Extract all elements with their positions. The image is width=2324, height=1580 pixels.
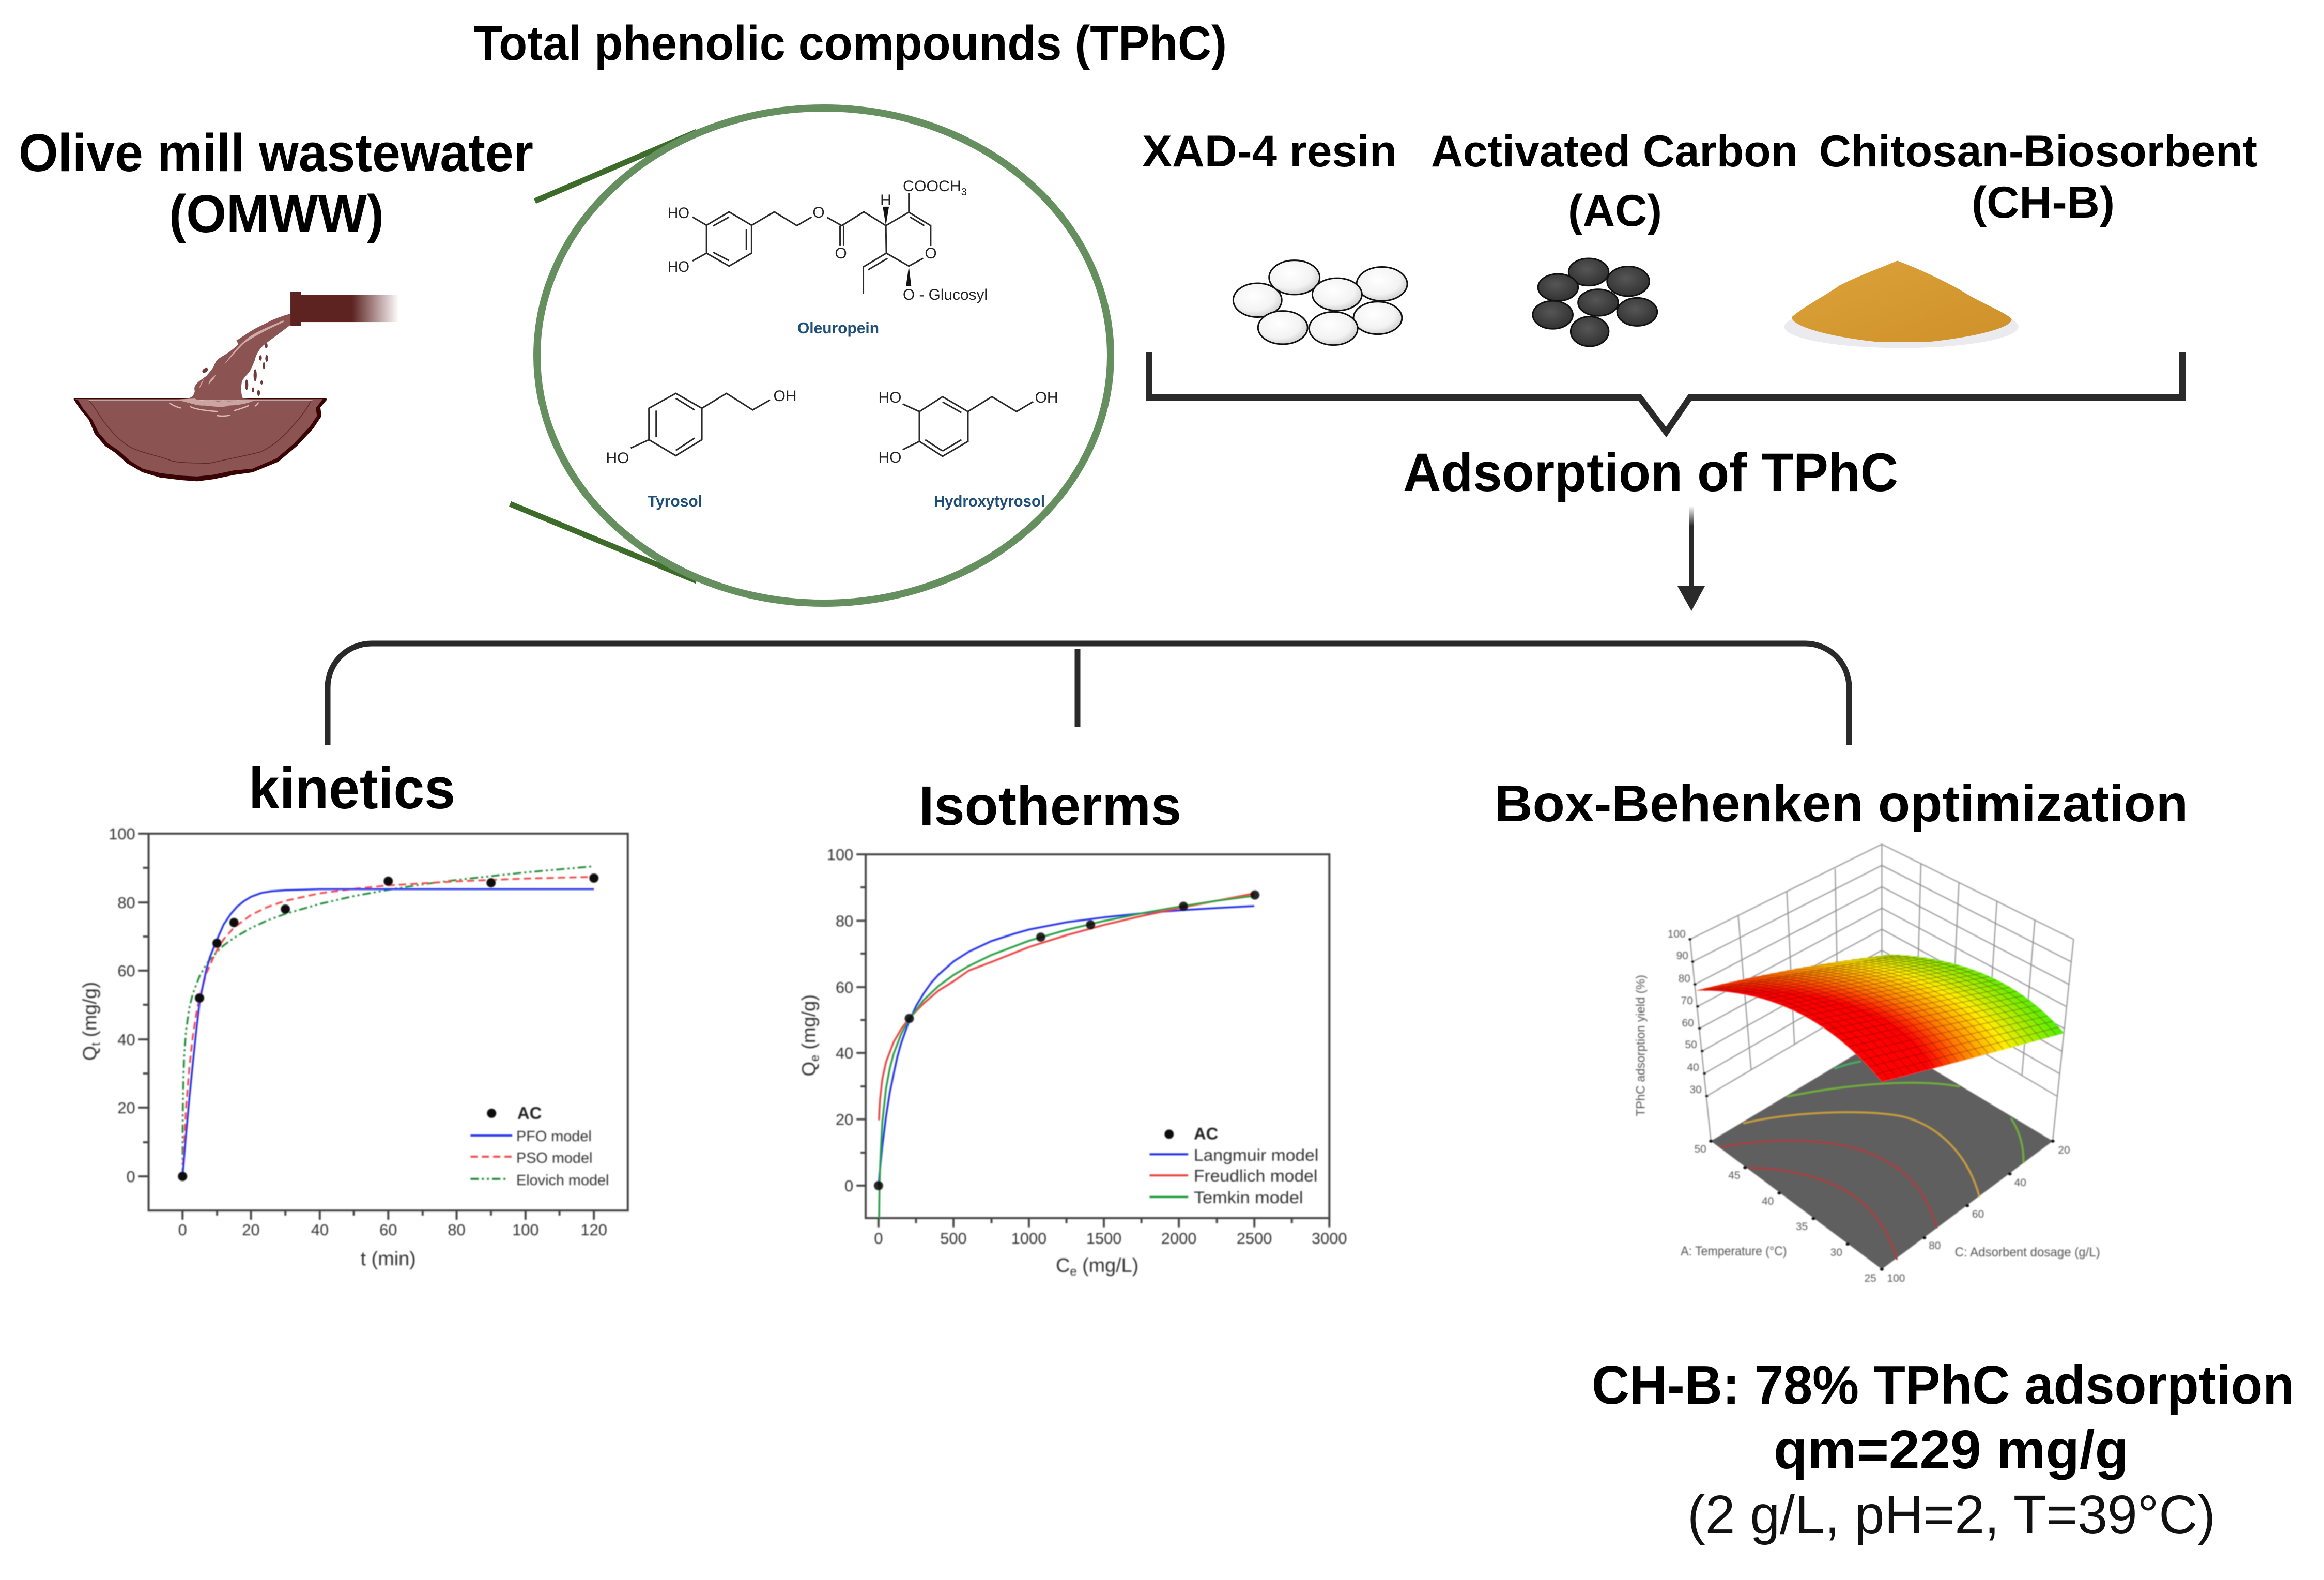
heading: isotherms: Isotherms: [919, 774, 1181, 837]
molecule: oleuropein: O: [835, 245, 847, 262]
axis labels: temperature: A: Temperature (°C): [1681, 1244, 1787, 1259]
molecule: oleuropein: O: [925, 245, 937, 262]
axis labels: adsorbent dosage: 20: [2058, 1144, 2070, 1156]
axis labels: adsorbent dosage: 60: [1972, 1208, 1984, 1220]
molecule: oleuropein: H: [880, 192, 891, 209]
response surface: [1696, 955, 2064, 1082]
molecule: hydroxytyrosol: OH: [1035, 389, 1058, 406]
axis labels: temperature: [1681, 1143, 1876, 1284]
heading: kinetics: kinetics: [249, 756, 455, 821]
axis labels: response axis: 50: [1685, 1039, 1697, 1051]
chart: isotherms: (mg/L): [1077, 1255, 1138, 1277]
result text: CH-B adsorption summary: qm=229 mg/g: [1774, 1419, 2129, 1480]
chart: kinetics: t: [89, 1042, 103, 1046]
legend: isotherms: Langmuir model: [1194, 1145, 1318, 1164]
molecule: hydroxytyrosol: Hydroxytyrosol: [934, 492, 1045, 510]
axis labels: response axis: TPhC adsorption yield (%): [1634, 975, 1648, 1116]
chart: isotherms: 1000: [1011, 1229, 1046, 1247]
result text: CH-B adsorption summary: CH-B: 78% TPhC adsorption: [1592, 1355, 2295, 1416]
heading: activated carbon: Activated Carbon: [1431, 127, 1798, 176]
axis labels: temperature: 35: [1796, 1221, 1808, 1233]
axis labels: adsorbent dosage: 80: [1929, 1240, 1941, 1252]
chart: isotherms: 0: [844, 1177, 853, 1195]
chart: kinetics: 100: [512, 1221, 539, 1239]
axis labels: response axis: 70: [1681, 995, 1693, 1007]
legend: kinetics: PSO model: [516, 1150, 592, 1167]
axis labels: temperature: 30: [1830, 1247, 1842, 1259]
legend: kinetics: Elovich model: [516, 1172, 609, 1189]
chart: kinetics: 40: [311, 1221, 329, 1239]
chart: kinetics: 0: [127, 1168, 135, 1186]
molecule: tyrosol: [606, 388, 797, 510]
chart: kinetics: 80: [117, 894, 135, 912]
legend: isotherms: [1150, 1124, 1318, 1207]
legend: kinetics: AC: [517, 1103, 542, 1123]
bracket: three analyses: [328, 643, 1849, 745]
molecule: oleuropein: O - Glucosyl: [903, 286, 988, 303]
chart: isotherms: 500: [940, 1229, 967, 1247]
icon: chitosan biosorbent powder: [1784, 260, 2019, 348]
legend: kinetics: PFO model: [516, 1128, 592, 1145]
axis labels: temperature: 25: [1864, 1272, 1876, 1284]
heading: activated carbon: (AC): [1568, 186, 1662, 236]
icon: white resin beads: [1233, 260, 1407, 345]
chart: kinetics: 20: [242, 1221, 260, 1239]
chart: isotherms: e: [1070, 1265, 1077, 1279]
legend: isotherms: Freudlich model: [1194, 1166, 1317, 1185]
icon: wastewater pouring from pipe into basin: [75, 292, 399, 480]
molecule: tyrosol: HO: [606, 450, 629, 467]
chart: kinetics: 0: [178, 1221, 187, 1239]
legend: isotherms: AC: [1194, 1124, 1218, 1143]
chart: kinetics: 60: [379, 1221, 397, 1239]
chart: kinetics: 60: [117, 962, 135, 980]
molecule: hydroxytyrosol: HO: [879, 389, 901, 406]
chart: isotherms: 60: [836, 978, 853, 996]
axis labels: adsorbent dosage: 100: [1887, 1272, 1905, 1284]
magnifier ellipse: [537, 108, 1111, 603]
heading: chitosan biosorbent: [1819, 127, 2257, 227]
chart: isotherms: 1500: [1086, 1229, 1121, 1247]
chart: isotherms: e: [808, 1055, 822, 1062]
chart: isotherms: 20: [836, 1111, 853, 1129]
chart: kinetics: 20: [117, 1099, 135, 1117]
axis tick dots: [1688, 938, 2055, 1271]
result text: CH-B adsorption summary: [1592, 1355, 2295, 1545]
walls grid: [1690, 844, 2073, 1141]
axis labels: response axis: 90: [1676, 950, 1688, 962]
chart: kinetics: 80: [448, 1221, 466, 1239]
chart: kinetics: 100: [109, 825, 135, 843]
chart: kinetics: t (min): [361, 1248, 416, 1270]
molecule: oleuropein: HO: [668, 205, 689, 222]
heading: adsorption of TPhC: Adsorption of TPhC: [1403, 442, 1898, 503]
molecule: oleuropein: 3: [961, 187, 967, 198]
axis labels: temperature: 40: [1762, 1195, 1774, 1207]
chart: isotherms: 3000: [1312, 1229, 1347, 1247]
chart: isotherms: 80: [836, 912, 853, 930]
molecule: oleuropein: O: [812, 204, 825, 221]
floor with contours: [1711, 1038, 2053, 1269]
chart: kinetics: Q: [79, 1046, 100, 1061]
title: total phenolic compounds: Total phenolic compounds (TPhC): [474, 16, 1227, 71]
molecule: oleuropein: HO: [668, 258, 689, 275]
molecule: oleuropein: [668, 178, 988, 337]
molecule: oleuropein: Oleuropein: [797, 319, 879, 337]
axis labels: adsorbent dosage: [1887, 1144, 2100, 1284]
chart: isotherms: [798, 846, 1347, 1279]
axis labels: adsorbent dosage: C: Adsorbent dosage (g/L): [1955, 1245, 2100, 1260]
heading: chitosan biosorbent: Chitosan-Biosorbent: [1819, 127, 2257, 176]
chart: kinetics: 40: [117, 1031, 135, 1049]
molecule: hydroxytyrosol: [879, 389, 1058, 510]
result text: CH-B adsorption summary: (2 g/L, pH=2, T=39°C): [1687, 1484, 2215, 1545]
chart: isotherms: 0: [874, 1229, 883, 1247]
chart: Box-Behnken 3D response surface: [1634, 844, 2100, 1284]
chart: isotherms: C: [1056, 1255, 1070, 1277]
heading: olive mill wastewater: Olive mill wastewater: [19, 123, 533, 182]
icon: activated carbon granules: [1533, 258, 1657, 346]
chart: isotherms: 40: [836, 1044, 853, 1062]
axis labels: temperature: 50: [1694, 1143, 1706, 1155]
axis labels: response axis: 30: [1690, 1084, 1702, 1096]
chart: isotherms: Q: [798, 1062, 820, 1077]
axis labels: adsorbent dosage: 40: [2014, 1177, 2026, 1189]
axis labels: response axis: 100: [1668, 928, 1686, 940]
axis labels: response axis: 60: [1682, 1017, 1694, 1029]
chart: isotherms: 100: [827, 846, 853, 864]
chart: kinetics: (mg/g): [79, 982, 100, 1042]
panel: phenolic compounds magnifier: [510, 108, 1111, 603]
heading: olive mill wastewater: [19, 123, 533, 243]
molecule: tyrosol: Tyrosol: [648, 492, 702, 510]
axis labels: response axis: 80: [1679, 973, 1690, 985]
axis labels: response axis: 40: [1687, 1062, 1699, 1073]
heading: chitosan biosorbent: (CH-B): [1972, 178, 2115, 227]
axis labels: temperature: 45: [1728, 1170, 1741, 1182]
heading: olive mill wastewater: (OMWW): [169, 184, 384, 243]
chart: isotherms: (mg/g): [798, 994, 820, 1055]
molecule: oleuropein: COOCH: [903, 178, 961, 195]
chart: isotherms: 2000: [1161, 1229, 1196, 1247]
molecule: hydroxytyrosol: HO: [879, 449, 901, 466]
legend: isotherms: Temkin model: [1194, 1188, 1303, 1207]
chart: kinetics: [79, 825, 628, 1270]
chart: kinetics: 120: [581, 1221, 607, 1239]
heading: activated carbon: [1431, 127, 1798, 236]
axis labels: response axis: [1634, 928, 1702, 1116]
bracket: sorbents to adsorption: [1149, 352, 2182, 432]
callout lines from basin to magnifier: [510, 132, 697, 581]
molecule: tyrosol: OH: [773, 388, 797, 405]
arrow: adsorption to analyses: [1677, 506, 1705, 611]
legend: kinetics: [470, 1103, 609, 1189]
heading: XAD-4 resin: XAD-4 resin: [1142, 127, 1397, 176]
chart: isotherms: 2500: [1237, 1229, 1272, 1247]
heading: Box-Behnken optimization: Box-Behenken optimization: [1495, 775, 2188, 833]
